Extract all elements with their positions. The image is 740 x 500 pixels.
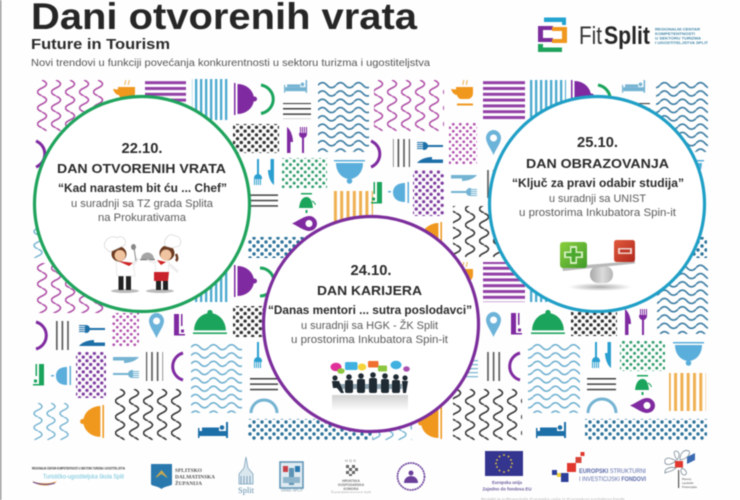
logo: round stamp <box>398 463 424 490</box>
logo: Europski strukturni i investicijski fondovi: EUROPSKI STRUKTURNI <box>579 468 646 475</box>
logo: European Union flag <box>482 451 532 492</box>
event slogan: “Ključ za pravi odabir studija” <box>512 178 684 190</box>
logo: Splitsko-dalmatinska županija: SPLITSKO <box>175 468 202 474</box>
logo: Hrvatska gospodarska komora: GOSPODARSKA <box>338 483 365 487</box>
description: Novi trendovi u funkciji povećanja konkurentnosti u sektoru turizma i ugostiteljstva <box>31 57 430 69</box>
logo: Europski strukturni i investicijski fondovi <box>552 452 646 483</box>
patterned mosaic background <box>33 79 708 440</box>
venue text: na Prokurativama <box>98 212 187 224</box>
icons: location pins <box>149 130 655 413</box>
partner text: u suradnji sa UNIST <box>549 193 646 205</box>
event name: DAN OTVORENIH VRATA <box>57 161 227 176</box>
date: 22.10. <box>122 141 162 157</box>
logo: FitSplit: KOMPETENTNOSTI <box>655 32 695 36</box>
dotted tiles <box>76 122 707 440</box>
icons: beds <box>198 80 645 438</box>
logo: FitSplit <box>538 18 709 52</box>
event name: DAN KARIJERA <box>317 283 423 298</box>
partner text: u suradnji sa TZ grada Splita <box>71 198 214 210</box>
venue text: u prostorima Inkubatora Spin-it <box>519 207 676 219</box>
logo: FitSplit: Fit <box>579 22 602 50</box>
logo: FitSplit: U SEKTORU TURIZMA <box>655 36 701 40</box>
icons: marks and bells <box>33 160 704 395</box>
logo: Hrvatska gospodarska komora: Županijska komora Split <box>331 489 371 494</box>
icons: arcs <box>36 85 616 413</box>
logo: FitSplit: REGIONALNI CENTAR <box>655 28 700 32</box>
logo: Splitsko-dalmatinska županija: ŽUPANIJA <box>175 479 202 487</box>
icons: cloches <box>80 80 594 439</box>
logo: Hrvatska gospodarska komora <box>331 459 371 494</box>
illustration: plus and minus balance <box>560 240 635 291</box>
subtitle: Future in Tourism <box>31 36 170 53</box>
logo: Kaštela coat of arms <box>280 462 304 492</box>
logo: Europski strukturni i investicijski fondovi: I INVESTICIJSKI FONDOVI <box>579 476 646 483</box>
logo: FitSplit: Split <box>604 22 651 50</box>
illustration: two young chefs <box>104 235 181 293</box>
logo: Flower emblem: Razvoj <box>682 477 691 481</box>
date: 25.10. <box>577 135 618 151</box>
date: 24.10. <box>350 263 392 279</box>
logo: Turističko-ugostiteljska škola Split <box>32 466 125 486</box>
logo: Kaštela coat of arms: GRAD SPLIT <box>281 488 304 492</box>
logo: European Union flag: Zajedno do fondova EU <box>482 486 532 492</box>
event name: DAN OBRAZOVANJA <box>526 156 670 171</box>
panel: 24.10. Dan karijera <box>264 216 478 432</box>
logo: Hrvatska gospodarska komora: KOMORA <box>343 487 359 491</box>
illustration: meeting with speech bubbles <box>330 361 410 411</box>
footer logos <box>32 450 697 500</box>
logo: Hrvatska gospodarska komora: HRVATSKA <box>342 479 360 483</box>
logo: Splitsko-dalmatinska županija <box>151 464 215 489</box>
logo: FitSplit: I UGOSTITELJSTVA SPLIT <box>655 41 709 45</box>
venue text: u prostorima Inkubatora Spin-it <box>291 334 448 346</box>
logo: Grad Split: Split <box>238 486 255 495</box>
icons: cups <box>113 80 473 288</box>
logo: Splitsko-dalmatinska županija: DALMATINSKA <box>175 474 215 480</box>
stripe tiles <box>54 79 706 411</box>
panel: 25.10. Dan obrazovanja <box>490 96 704 312</box>
logo: Turističko-ugostiteljska škola Split: REGIONALNI CENTAR KOMPETENTNOSTI U SEKTORU TURIZMA I UGOSTITELJSTVA <box>32 466 125 470</box>
icons: cutlery <box>79 127 647 378</box>
event slogan: “Danas mentori ... sutra poslodavci” <box>268 305 472 317</box>
logo: Flower emblem: Ljudskih <box>682 481 694 485</box>
logo: Hrvatska gospodarska komora: HGK <box>345 459 356 463</box>
event slogan: “Kad narastem bit ću ... Chef” <box>58 183 227 195</box>
logo: Flower emblem <box>665 450 697 489</box>
wave tiles <box>191 81 708 413</box>
logo: European Union flag: Europska unija <box>492 480 523 485</box>
logo: Flower emblem: Potencijala <box>682 485 697 489</box>
panel: 22.10. Dan otvorenih vrata <box>34 96 250 312</box>
partner text: u suradnji sa HGK - ŽK Split <box>301 319 438 332</box>
squiggle tiles <box>33 80 523 440</box>
logo: Turističko-ugostiteljska škola Split: Turističko-ugostiteljska škola Split <box>43 474 124 480</box>
logo: Grad Split <box>238 457 255 495</box>
heading block <box>31 0 430 69</box>
